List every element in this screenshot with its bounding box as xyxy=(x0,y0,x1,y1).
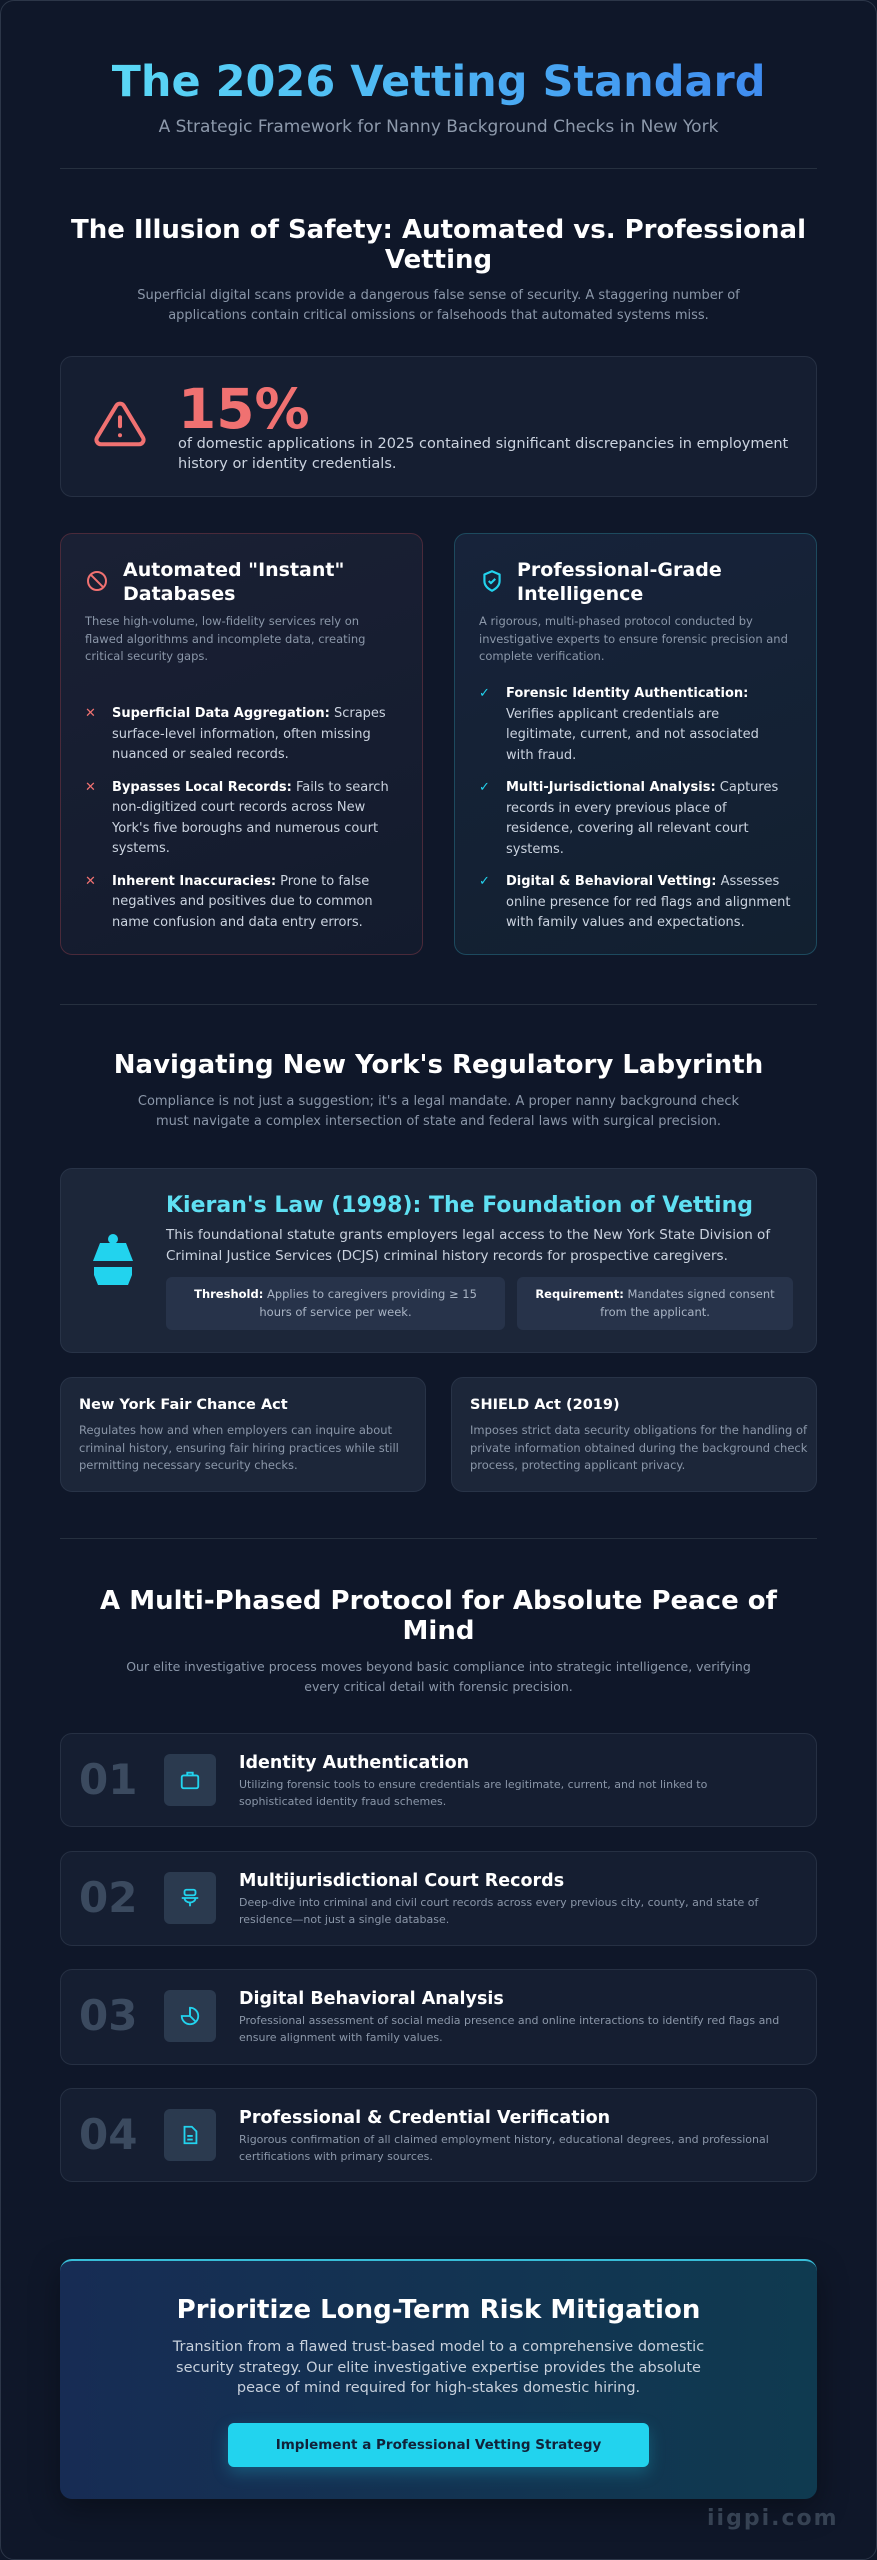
step 03 xyxy=(60,1969,817,2065)
panel: Fair Chance Act: New York Fair Chance Act xyxy=(79,1397,288,1413)
list: strengths: Digital & Behavioral Vetting: Assesses xyxy=(506,874,779,889)
list: flaws: Bypasses Local Records: Fails to search non-digitized court records across New York's five boroughs and numerous court systems. xyxy=(112,780,389,856)
text: protocol intro: Our elite investigative process moves beyond basic compliance into strategic intelligence, verifying every critical detail with forensic precision. xyxy=(126,1659,751,1694)
step 02: Deep-dive into criminal and civil court records across every previous city, county, and state of residence—not just a single database. xyxy=(239,1896,758,1926)
step 04 xyxy=(60,2088,817,2182)
step 04: Rigorous confirmation of all claimed employment history, educational degrees, and professional certifications with primary sources. xyxy=(239,2133,769,2163)
heading: Automated "Instant" Databases xyxy=(123,559,344,605)
step 01: Utilizing forensic tools to ensure credentials are legitimate, current, and not linked to sophisticated identity fraud schemes. xyxy=(239,1778,707,1808)
list: strengths: with family values and expectations. xyxy=(506,915,745,930)
list: strengths: ✓ xyxy=(479,780,490,795)
watermark: iigpi.com xyxy=(707,2506,839,2531)
icon: warning triangle xyxy=(94,402,146,446)
icon: pie globe xyxy=(164,1990,216,2042)
list: strengths: residence, covering all relevant court xyxy=(506,821,749,836)
box: threshold xyxy=(166,1277,505,1330)
heading: Prioritize Long-Term Risk Mitigation xyxy=(177,2295,700,2325)
list: strengths: with fraud. xyxy=(506,748,576,762)
panel: SHIELD Act: SHIELD Act (2019) xyxy=(470,1397,620,1413)
subtitle: A Strategic Framework for Nanny Background Checks in New York xyxy=(159,117,718,137)
list: strengths: legitimate, current, and not associated xyxy=(506,727,759,742)
description: A rigorous, multi-phased protocol conducted by investigative experts to ensure forensic precision and complete verification. xyxy=(479,614,788,663)
step 01 xyxy=(60,1733,817,1827)
heading: multi-phased protocol: A Multi-Phased Protocol for Absolute Peace of Mind xyxy=(100,1586,777,1646)
step 04: 04 xyxy=(79,2110,137,2159)
box: requirement xyxy=(517,1277,793,1330)
icon: ban xyxy=(87,571,107,591)
panel: professional intelligence xyxy=(454,533,817,955)
list: flaws xyxy=(85,706,389,930)
panel: Fair Chance Act xyxy=(60,1377,426,1492)
title: The 2026 Vetting Standard xyxy=(112,57,765,107)
text: regulatory intro: Compliance is not just a suggestion; it's a legal mandate. A proper nanny background check must navigate a complex intersection of state and federal laws with surgical precision. xyxy=(138,1094,739,1129)
panel: Kieran's Law xyxy=(60,1168,817,1353)
panel: call to action xyxy=(60,2259,817,2499)
body: This foundational statute grants employers legal access to the New York State Division of Criminal Justice Services (DCJS) criminal history records for prospective caregivers. xyxy=(166,1227,770,1264)
panel: Fair Chance Act: Regulates how and when employers can inquire about criminal history, ensuring fair hiring practices while still permitting necessary security checks. xyxy=(79,1423,399,1472)
step 01: Identity Authentication xyxy=(239,1753,469,1773)
list: strengths: Forensic Identity Authentication: xyxy=(506,686,748,701)
panel: SHIELD Act: Imposes strict data security obligations for the handling of private information obtained during the background check process, protecting applicant privacy. xyxy=(470,1423,807,1472)
list: flaws: ✕ xyxy=(85,706,96,721)
step 01: 01 xyxy=(79,1755,137,1804)
text: illusion intro: Superficial digital scans provide a dangerous false sense of security. A staggering number of applications contain critical omissions or falsehoods that automated systems miss. xyxy=(137,288,740,323)
icon: document xyxy=(164,2109,216,2161)
body: Transition from a flawed trust-based model to a comprehensive domestic security strategy. Our elite investigative expertise provides the absolute peace of mind required for high-stakes domestic hiring. xyxy=(173,2339,704,2396)
panel: stat 15% xyxy=(60,356,817,497)
icon: briefcase xyxy=(164,1754,216,1806)
step 02 xyxy=(60,1851,817,1946)
icon: gavel/bell xyxy=(93,1234,133,1285)
list: flaws: ✕ xyxy=(85,780,96,794)
panel: SHIELD Act xyxy=(451,1377,817,1492)
icon: scales xyxy=(164,1872,216,1924)
list: strengths: systems. xyxy=(506,842,564,856)
heading: Professional-Grade Intelligence xyxy=(517,559,722,605)
stat number: 15% xyxy=(178,377,310,441)
panel: automated databases xyxy=(60,533,423,955)
step 04: Professional & Credential Verification xyxy=(239,2108,610,2128)
heading: illusion of safety: The Illusion of Safety: Automated vs. Professional Vetting xyxy=(71,215,806,275)
heading: Kieran's Law (1998): The Foundation of Vetting xyxy=(166,1193,753,1218)
stat text: of domestic applications in 2025 contained significant discrepancies in employment history or identity credentials. xyxy=(178,436,788,472)
icon: shield check xyxy=(483,570,501,592)
list: strengths xyxy=(479,686,790,930)
description: These high-volume, low-fidelity services rely on flawed algorithms and incomplete data, creating critical security gaps. xyxy=(85,614,365,663)
box: requirement: from the applicant. xyxy=(600,1305,710,1319)
step 03: Professional assessment of social media presence and online interactions to identify red flags and ensure alignment with family values. xyxy=(239,2014,779,2044)
list: strengths: Multi-Jurisdictional Analysis: Captures xyxy=(506,780,778,795)
box: threshold: Threshold: Applies to caregivers providing ≥ 15 xyxy=(194,1287,477,1301)
list: flaws: Inherent Inaccuracies: Prone to false negatives and positives due to common name confusion and data entry errors. xyxy=(112,874,373,930)
list: strengths: records in every previous place of xyxy=(506,800,727,816)
list: strengths: ✓ xyxy=(479,686,490,701)
box: requirement: Requirement: Mandates signed consent xyxy=(535,1287,775,1301)
heading: regulatory labyrinth: Navigating New York's Regulatory Labyrinth xyxy=(114,1050,763,1080)
list: flaws: Superficial Data Aggregation: Scrapes surface-level information, often missing nuanced or sealed records. xyxy=(112,706,386,762)
step 02: 02 xyxy=(79,1873,137,1922)
step 02: Multijurisdictional Court Records xyxy=(239,1871,564,1891)
list: flaws: ✕ xyxy=(85,874,96,888)
step 03: Digital Behavioral Analysis xyxy=(239,1989,504,2009)
list: strengths: Verifies applicant credentials are xyxy=(506,706,719,722)
step 03: 03 xyxy=(79,1991,137,2040)
button xyxy=(228,2423,649,2467)
list: strengths: online presence for red flags and alignment xyxy=(506,894,790,910)
list: strengths: ✓ xyxy=(479,874,490,889)
box: threshold: hours of service per week. xyxy=(259,1305,412,1319)
button: Implement a Professional Vetting Strategy xyxy=(276,2437,601,2453)
